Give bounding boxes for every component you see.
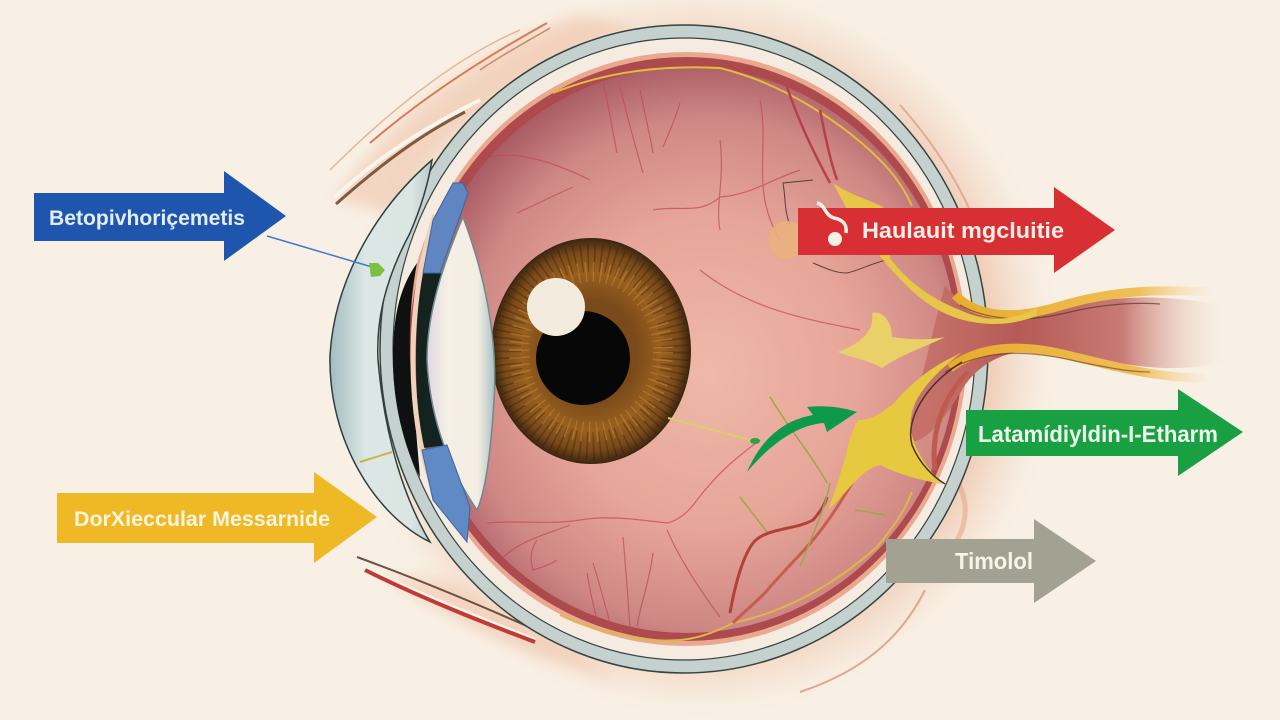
ciliary body bottom bbox=[422, 445, 470, 542]
iris bbox=[491, 238, 691, 464]
lower arteries bbox=[730, 497, 827, 613]
arrow: yellow bbox=[57, 472, 377, 563]
lens bbox=[427, 217, 495, 510]
retinal vessels bbox=[487, 83, 860, 627]
arrow: red: Haulauit mgcluitie bbox=[862, 218, 1064, 243]
anterior chamber bbox=[393, 263, 420, 477]
eyelid surroundings bbox=[330, 0, 1065, 720]
yellow optic disc tissue bbox=[768, 183, 1037, 510]
arrow: green: Latamídiyldin-I-Etharm bbox=[978, 421, 1218, 447]
arrow: blue: Betopivhoriçemetis bbox=[49, 207, 245, 230]
thin dark outline bbox=[783, 180, 887, 273]
rim nerve line bbox=[553, 67, 912, 206]
arrow: blue bbox=[34, 171, 286, 261]
fundus bbox=[417, 67, 957, 641]
iris pointer bbox=[668, 418, 760, 444]
sclera bbox=[380, 25, 988, 673]
green vessels bbox=[740, 397, 885, 567]
pointer: blue line bbox=[267, 236, 385, 277]
iris root dark band bbox=[416, 273, 448, 448]
pale inner strip bbox=[413, 215, 436, 498]
upper arteries bbox=[787, 87, 837, 183]
arrow: green bbox=[966, 389, 1243, 476]
arrow: grey: Timolol bbox=[955, 548, 1033, 574]
curved green pointer bbox=[747, 406, 857, 472]
ciliary body top bbox=[423, 183, 468, 273]
cornea bbox=[330, 160, 432, 542]
arrow: red bbox=[798, 187, 1115, 273]
arrow: grey bbox=[886, 519, 1096, 603]
retina layers bbox=[393, 38, 975, 660]
arrow: yellow: DorXieccular Messarnide bbox=[74, 508, 330, 531]
optic nerve bbox=[905, 285, 1222, 442]
